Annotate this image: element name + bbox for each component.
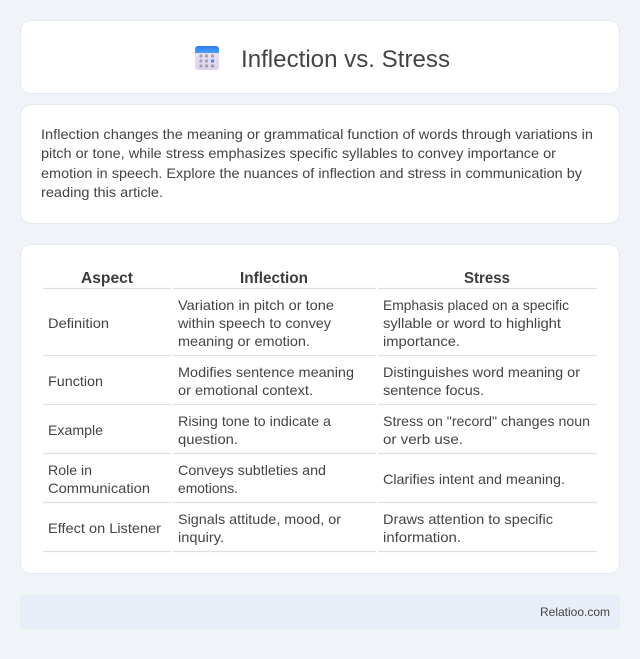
row: definition: within speech to convey [177,315,331,331]
row: role in communication: Communication [48,480,150,496]
row: effect on listener: Effect on Listener [48,520,161,536]
row: function: Distinguishes word meaning or [383,364,580,380]
row: definition: Variation in pitch or tone [178,297,334,313]
row: definition: syllable or word to highlight [383,315,561,331]
row: example: Example [48,422,103,438]
row: function: or emotional context. [178,382,313,398]
row: effect on listener: information. [383,529,461,545]
row: role in communication: Conveys subtleties and [178,462,326,478]
row: effect on listener [48,511,553,545]
row: definition: Emphasis placed on a specific [383,297,569,313]
table header [81,270,510,287]
table header: Stress [464,270,510,287]
row: definition [48,297,569,349]
row: role in communication: Role in [48,462,92,478]
row: function [48,364,580,398]
row: role in communication: Clarifies intent and meaning. [383,471,565,487]
panel: comparison table [20,244,620,574]
table header: Inflection [240,270,308,287]
row: example [48,413,590,447]
row: definition: meaning or emotion. [178,333,310,349]
row: function: sentence focus. [383,382,484,398]
row: effect on listener: Signals attitude, mood, or [178,511,341,527]
table header: Aspect [81,270,134,287]
row: definition: importance. [383,333,460,349]
intro text: reading this article. [41,184,163,200]
icon: calendar [195,46,219,70]
panel: introduction [20,104,620,224]
panel: title card [20,20,620,94]
row: role in communication [48,462,565,496]
row: effect on listener: Draws attention to specific [383,511,553,527]
footer credit: Relatioo.com [540,605,610,619]
intro text [41,126,593,200]
row: effect on listener: inquiry. [178,529,224,545]
row: definition: Definition [48,315,109,331]
row: function: Modifies sentence meaning [178,364,354,380]
footer [20,595,620,629]
row: function: Function [48,373,103,389]
table rules [43,288,597,552]
row: example: Rising tone to indicate a [178,413,331,429]
row: role in communication: emotions. [178,480,238,496]
intro text: Inflection changes the meaning or grammatical function of words through variations in [41,126,593,142]
row: example: Stress on "record" changes noun [383,413,590,429]
row: example: question. [178,431,238,447]
row: example: or verb use. [383,431,463,447]
intro text: pitch or tone, while stress emphasizes specific syllables to convey importance or [41,145,556,161]
intro text: emotion in speech. Explore the nuances of inflection and stress in communication by [41,165,582,181]
title: Inflection vs. Stress [241,46,450,73]
